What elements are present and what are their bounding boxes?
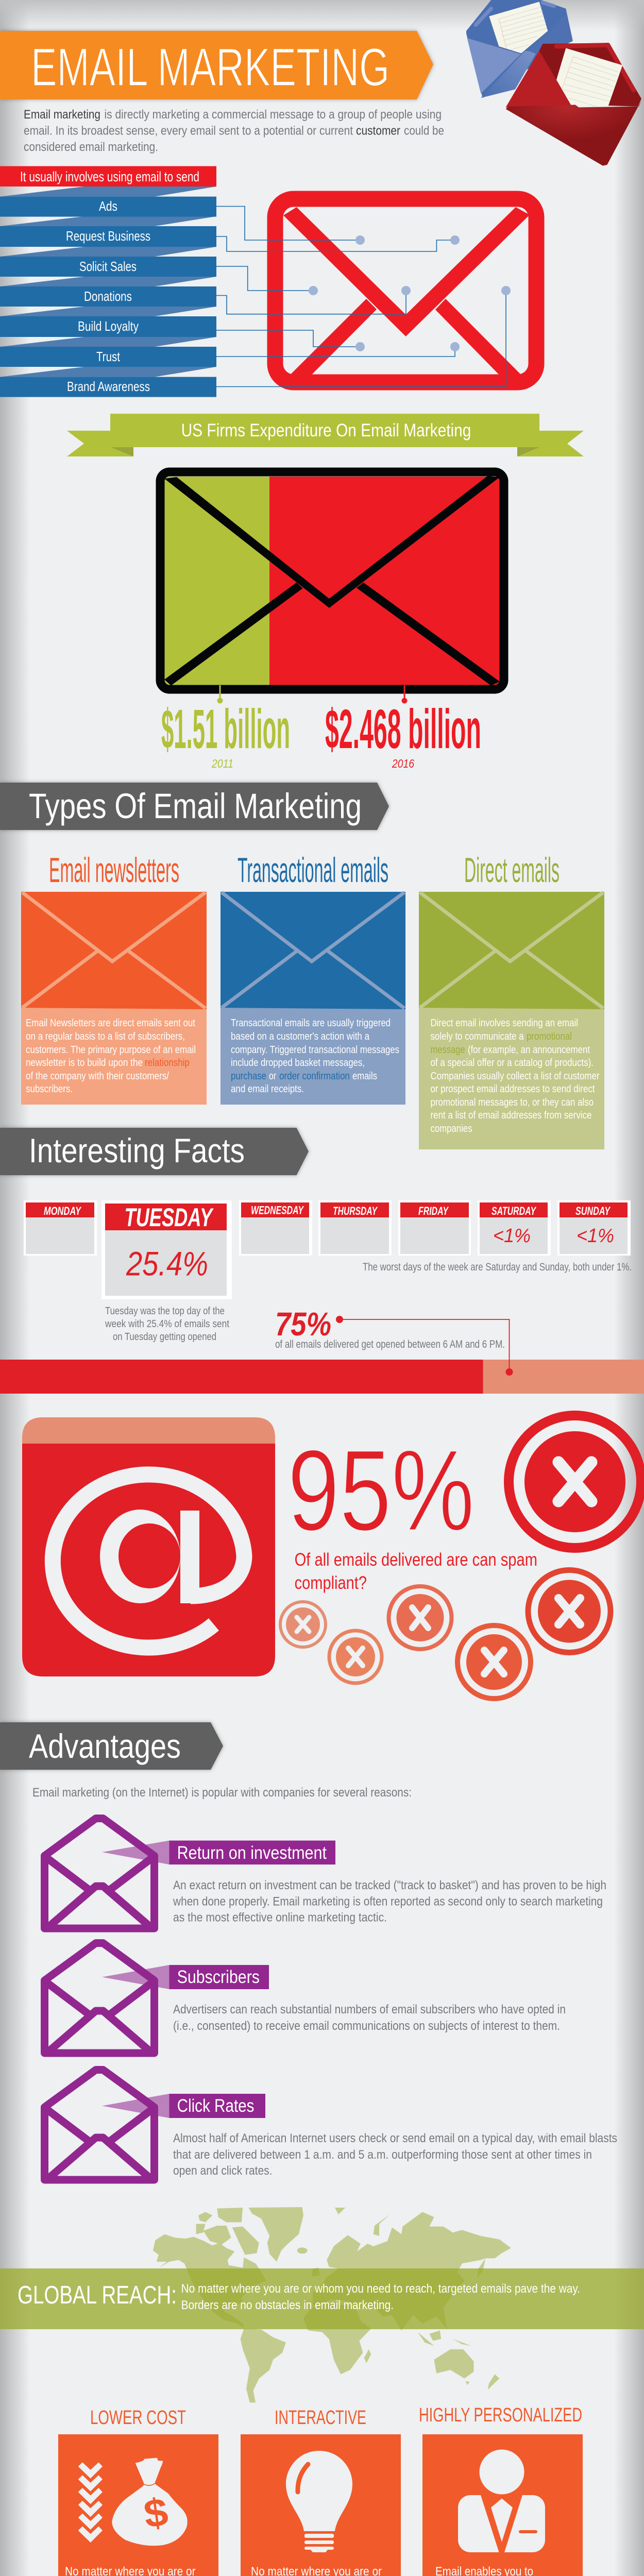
chart: world map [153, 2207, 511, 2402]
card: transactional emails: include dropped basket messages, [231, 1057, 365, 1069]
ribbon list [0, 187, 216, 397]
card: direct emails [419, 851, 604, 1149]
panel: spam compliance [22, 1416, 641, 1699]
card: direct emails: rent a list of email addresses from service [431, 1110, 591, 1121]
card: email newsletters: newsletter is to build upon the [26, 1057, 143, 1069]
note: top day: Tuesday was the top day of the [105, 1306, 225, 1317]
panel: US expenditure: $1.51 billion [161, 698, 290, 760]
intro text: is directly marketing a commercial message to a group of people using [104, 108, 442, 122]
callout label: Subscribers [177, 1967, 260, 1987]
ribbon list: Build Loyalty [78, 318, 139, 334]
section heading [0, 1722, 223, 1770]
card: email newsletters: relationship [145, 1057, 190, 1069]
icon: purple envelope [44, 1943, 155, 2053]
card: direct emails: promotional [527, 1031, 572, 1042]
intro text: Email marketing (on the Internet) is popular with companies for several reasons: [32, 1786, 412, 1800]
callout label: Return on investment [177, 1843, 327, 1863]
heading: LOWER COST [90, 2407, 186, 2429]
body text: Advertisers can reach substantial numbers of email subscribers who have opted in [173, 2003, 566, 2016]
callout label [102, 2094, 265, 2118]
banner: GLOBAL REACH: [18, 2281, 177, 2309]
card: transactional emails: based on a customer's action with a [231, 1031, 370, 1042]
panel: interesting facts [0, 1128, 644, 1394]
card: direct emails: (for example, an announcement [468, 1044, 590, 1056]
connector dots [309, 235, 511, 351]
intro text: customer [356, 124, 400, 138]
card: direct emails: or prospect email addresses to send direct [431, 1083, 595, 1095]
icon: money bag and down chevrons [78, 2458, 188, 2546]
card: transactional emails: company. Triggered transactional messages [231, 1044, 399, 1056]
ribbon heading [0, 166, 216, 187]
card: transactional emails [221, 851, 405, 1105]
banner: Borders are no obstacles in email marketing. [181, 2298, 394, 2312]
panel: interactive [241, 2407, 401, 2576]
question text: compliant? [295, 1573, 367, 1593]
calendar: saturday: SATURDAY [492, 1205, 537, 1217]
card: email newsletters: Email Newsletters are direct emails sent out [26, 1018, 195, 1029]
body text: that are delivered between 1 a.m. and 5 a.m. outperforming those sent at other times in [173, 2148, 592, 2162]
ribbon heading: US Firms Expenditure On Email Marketing [181, 420, 471, 440]
heading: HIGHLY PERSONALIZED [419, 2404, 582, 2426]
note: top day: week with 25.4% of emails sent [105, 1318, 229, 1330]
card: email newsletters [21, 851, 207, 1105]
intro text: could be [404, 124, 444, 138]
icon: purple envelope [44, 1819, 155, 1928]
callout label [102, 1840, 335, 1865]
ribbon heading: It usually involves using email to send [20, 169, 199, 184]
section heading [0, 1128, 309, 1175]
icon: red envelope outline [275, 199, 536, 382]
icon: red envelope [506, 43, 641, 166]
calendar: tuesday: TUESDAY [125, 1203, 214, 1232]
panel: US expenditure [67, 414, 584, 770]
card: direct emails: of a special offer or a catalog of products). [431, 1057, 594, 1069]
calendar: monday [24, 1200, 97, 1256]
panel: lower cost [58, 2407, 218, 2576]
section heading: Interesting Facts [29, 1131, 245, 1170]
calendar: thursday: THURSDAY [333, 1205, 378, 1217]
banner: No matter where you are or whom you need to reach, targeted emails pave the way. [181, 2282, 580, 2296]
icon: large cross badge [509, 1416, 641, 1548]
stat: 2011 [161, 685, 290, 770]
stat: 75 percent opened: 75% [275, 1306, 331, 1343]
card: email newsletters: of the company with their customers/ [26, 1071, 169, 1082]
card: email newsletters: customers. The primary purpose of an email [26, 1044, 196, 1056]
icon: blue envelope [466, 0, 573, 98]
callout label: Click Rates [177, 2096, 255, 2116]
item: click rates [44, 2070, 617, 2180]
card: direct emails: Direct email involves sending an email [431, 1018, 578, 1029]
card: transactional emails: Transactional emails are usually triggered [231, 1018, 391, 1029]
bar chart: 75 percent bar [0, 1316, 644, 1394]
ribbon list: Trust [96, 349, 121, 364]
banner [0, 2268, 644, 2329]
title banner [0, 31, 433, 99]
panel: what email marketing sends [0, 166, 536, 397]
item: subscribers [44, 1943, 566, 2053]
calendar: sunday [557, 1200, 631, 1256]
note: top day: on Tuesday getting opened [113, 1331, 216, 1343]
panel: highly personalized [419, 2404, 583, 2576]
card: direct emails: promotional messages to, or they can also [431, 1097, 594, 1108]
card: direct emails: message [431, 1044, 465, 1056]
heading: INTERACTIVE [275, 2407, 366, 2429]
ribbon list: Request Business [66, 228, 150, 244]
body text: as the most effective online marketing tactic. [173, 1911, 387, 1925]
calendar: sunday: SUNDAY [575, 1205, 611, 1217]
panel: advantages [0, 1722, 617, 2180]
calendar: thursday [318, 1200, 392, 1256]
icon: business person [458, 2449, 545, 2552]
body text [173, 2003, 566, 2033]
stat: 95 percent: 95% [287, 1426, 474, 1555]
card: direct emails: Companies usually collect a list of customer [431, 1071, 600, 1082]
calendar: tuesday [101, 1200, 232, 1299]
section heading: Advantages [29, 1727, 181, 1765]
icon: small cross badge 3 [388, 1586, 451, 1649]
icon: small cross badge 1 [280, 1602, 326, 1647]
icon: at sign tile [22, 1417, 275, 1676]
calendar: saturday: <1% [493, 1225, 531, 1247]
card: transactional emails: order confirmation [279, 1071, 350, 1082]
icon: purple envelope [44, 2070, 155, 2180]
calendar: wednesday [239, 1200, 312, 1256]
ribbon list: Donations [84, 289, 132, 304]
stat: 2016: 2016 [392, 757, 414, 770]
intro text: considered email marketing. [24, 140, 158, 154]
ribbon list: Ads [99, 198, 117, 214]
calendar: friday: FRIDAY [418, 1205, 449, 1217]
card: email newsletters: on a regular basis to a list of subscribers, [26, 1031, 185, 1042]
intro text: Email marketing [24, 108, 100, 122]
body text: (i.e., consented) to receive email communications on subjects of interest to them. [173, 2019, 560, 2033]
icon: small cross badge 2 [329, 1631, 382, 1683]
card: direct emails: solely to communicate a [431, 1031, 524, 1042]
panel: global reach [0, 2207, 644, 2402]
card: direct emails: companies [431, 1123, 472, 1134]
question text [295, 1550, 537, 1593]
icon: light bulb [286, 2451, 352, 2552]
ribbon list: Brand Awareness [67, 379, 150, 394]
question text: Of all emails delivered are can spam [295, 1550, 537, 1570]
stat: 75 percent opened [275, 1306, 505, 1350]
panel: types of email marketing [0, 783, 604, 1149]
calendar: saturday [478, 1200, 551, 1256]
item: return on investment [44, 1819, 606, 1928]
connector lines [216, 206, 506, 386]
body text [173, 1878, 606, 1925]
card: transactional emails: and email receipts. [231, 1083, 304, 1095]
ribbon heading [67, 414, 584, 456]
chart: envelope split by spend [160, 472, 504, 689]
note: top day [105, 1306, 229, 1343]
card: transactional emails: or [269, 1071, 276, 1082]
calendar: tuesday: 25.4% [126, 1245, 208, 1283]
icon: small cross badge 5 [528, 1570, 611, 1653]
stat: 2011: 2011 [211, 757, 233, 770]
card: transactional emails: purchase [231, 1071, 266, 1082]
calendar: sunday: <1% [577, 1225, 614, 1247]
icon: small cross badge 4 [457, 1625, 531, 1699]
intro text: email. In its broadest sense, every email sent to a potential or current [24, 124, 353, 138]
card: email newsletters: Email newsletters [49, 851, 179, 890]
stat: 2016 [325, 685, 481, 770]
stat: 75 percent opened: of all emails delivered get opened between 6 AM and 6 PM. [275, 1338, 505, 1350]
card: email newsletters: subscribers. [26, 1083, 73, 1095]
card: transactional emails: emails [352, 1071, 377, 1082]
icon: open envelopes with letters [466, 0, 641, 166]
callout label [102, 1965, 269, 1989]
card: transactional emails: Transactional emails [238, 851, 388, 890]
intro text [24, 108, 444, 154]
calendar: friday [398, 1200, 471, 1256]
calendar: wednesday: WEDNESDAY [251, 1204, 304, 1217]
header [0, 0, 641, 166]
title banner: EMAIL MARKETING [31, 38, 389, 97]
body text [173, 2131, 617, 2178]
body text: open and click rates. [173, 2164, 272, 2178]
ribbon list: Solicit Sales [79, 259, 137, 274]
icon: money bag and down chevrons: $ [141, 2490, 171, 2537]
section heading: Types Of Email Marketing [29, 786, 362, 826]
calendar: monday: MONDAY [44, 1205, 82, 1217]
